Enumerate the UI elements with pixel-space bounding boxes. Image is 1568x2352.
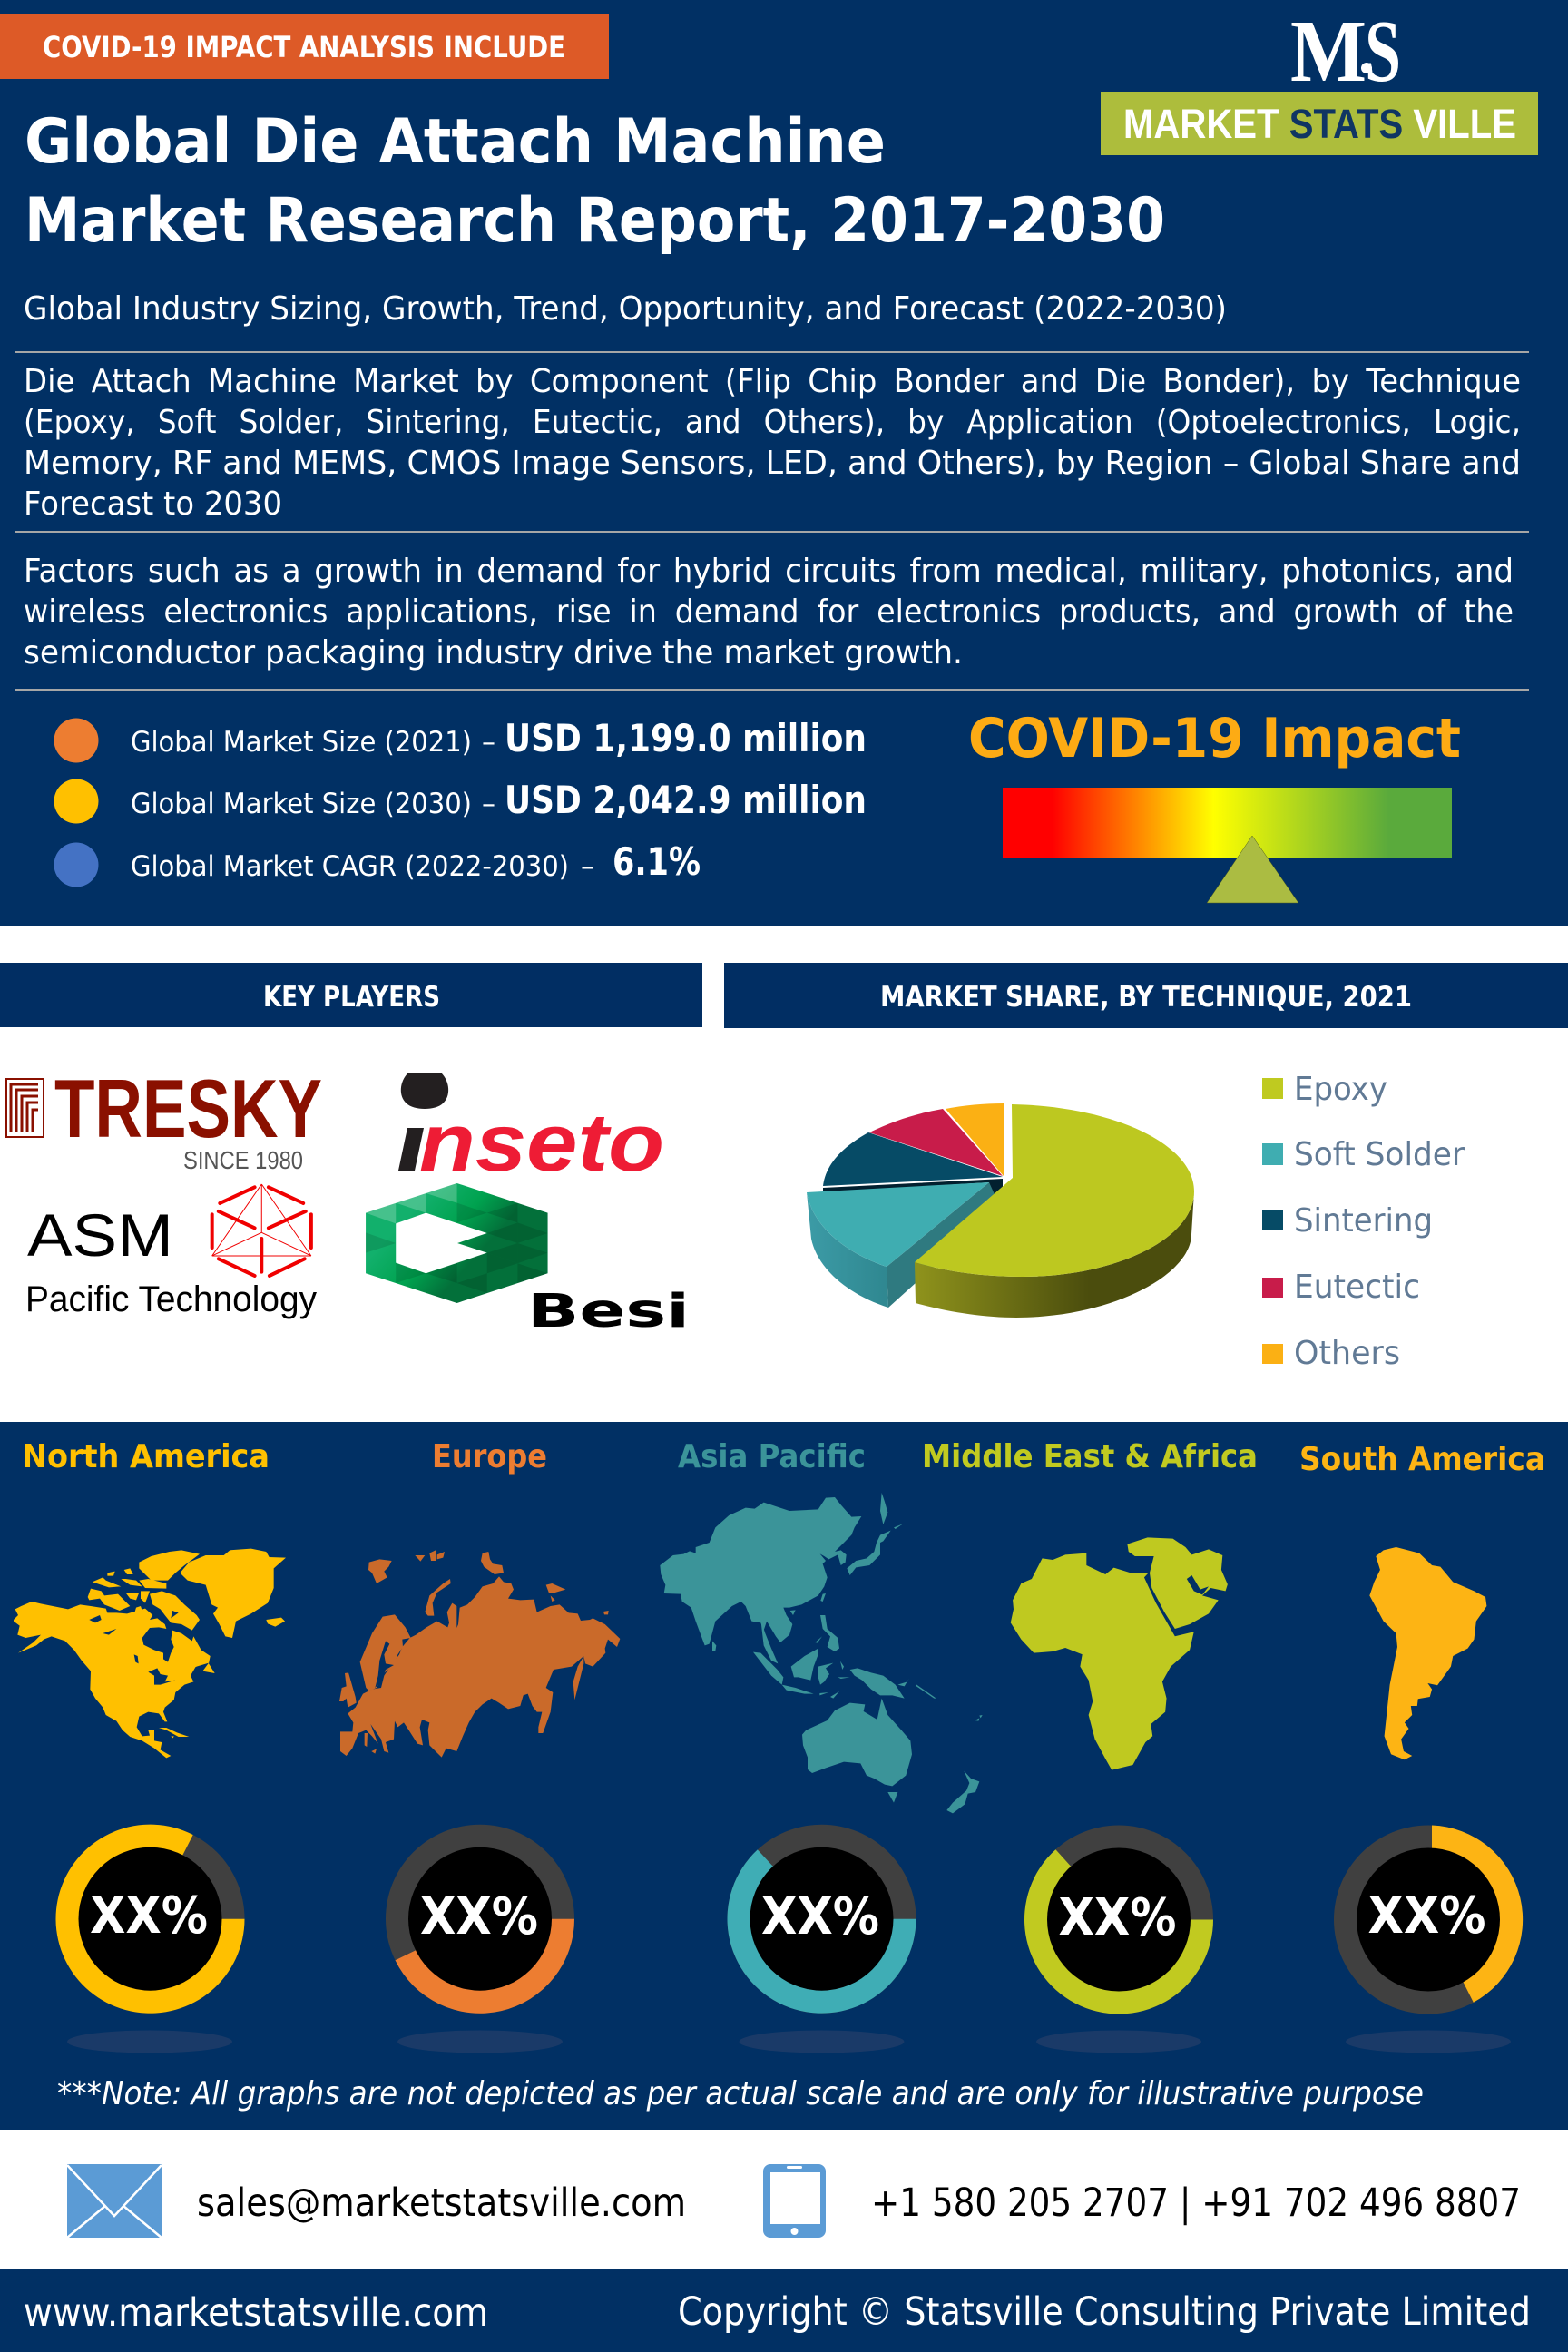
map: north america [14, 1549, 286, 1758]
email: sales@marketstatsville.com [197, 2180, 686, 2226]
logo: ASM Pacific Technology [25, 1184, 317, 1319]
legend item: soft solder: Soft Solder [1294, 1136, 1465, 1173]
logo: Tresky: SINCE 1980 [183, 1146, 303, 1174]
label: asia pacific: Asia Pacific [678, 1438, 866, 1475]
legend item: sintering: Sintering [1294, 1202, 1433, 1240]
stat: market size 2030: Global Market Size (2030) [131, 788, 472, 820]
website: www.marketstatsville.com [24, 2290, 488, 2336]
logo: Besi [366, 1183, 690, 1338]
factors paragraph [24, 553, 1514, 671]
note: ***Note: All graphs are not depicted as per actual scale and are only for illustrative purpose [57, 2075, 1424, 2112]
donut: north america: XX% [90, 1886, 208, 1945]
map: asia pacific [660, 1493, 983, 1813]
label: north america: North America [22, 1438, 270, 1475]
donut: asia pacific: XX% [761, 1887, 879, 1946]
legend item: eutectic: Eutectic [1294, 1269, 1420, 1306]
stat: CAGR [54, 839, 701, 887]
stat: CAGR: – [581, 850, 594, 883]
logo: Tresky [6, 1063, 322, 1174]
donut: south america [1334, 1826, 1523, 2053]
stat: CAGR: Global Market CAGR (2022-2030) [131, 850, 569, 883]
icon: phone [763, 2164, 826, 2238]
covid badge: COVID-19 IMPACT ANALYSIS INCLUDE [43, 30, 565, 64]
segmentation paragraph [24, 363, 1521, 523]
panel: header [0, 0, 1568, 926]
segmentation paragraph: Forecast to 2030 [24, 485, 282, 523]
donut: south america: XX% [1368, 1886, 1486, 1945]
icon: ASM crystal [212, 1184, 311, 1276]
logo: Market Stats Ville [1101, 3, 1538, 155]
icon: envelope [67, 2164, 162, 2238]
heading: market share: MARKET SHARE, BY TECHNIQUE, 2021 [880, 981, 1412, 1014]
logo: inseto: nseto [419, 1098, 664, 1189]
donut: north america [56, 1825, 245, 2053]
title: Global Die Attach Machine [24, 106, 886, 178]
panel: contact [0, 2130, 1568, 2269]
donut: europe [386, 1825, 574, 2053]
panel: footer [0, 2269, 1568, 2352]
segmentation paragraph: Die Attach Machine Market by Component (Flip Chip Bonder and Die Bonder), by Technique [24, 363, 1521, 400]
stat: market size 2021 [54, 716, 867, 762]
heading: key players: KEY PLAYERS [263, 981, 440, 1014]
label: south america: South America [1299, 1441, 1545, 1478]
logo: Market Stats Ville: M [1290, 3, 1367, 101]
slice: soft solder [807, 1182, 998, 1308]
logo: ASM Pacific Technology: ASM [27, 1201, 173, 1269]
map: europe and russia [339, 1550, 620, 1758]
logo: Tresky: TRESKY [54, 1063, 322, 1155]
legend: techniques [1262, 1071, 1465, 1372]
heading: key players [0, 963, 702, 1027]
subtitle: Global Industry Sizing, Growth, Trend, Opportunity, and Forecast (2022-2030) [24, 290, 1227, 328]
logo: inseto [398, 1073, 664, 1189]
slice: eutectic [869, 1109, 1003, 1176]
chart: market share 3D pie [807, 1103, 1194, 1318]
stat: market size 2021: – [482, 726, 495, 759]
stat: market size 2030: USD 2,042.9 million [505, 778, 867, 822]
panel: regions [0, 1422, 1568, 2130]
segmentation paragraph: Memory, RF and MEMS, CMOS Image Sensors, LED, and Others), by Region – Global Share and [24, 445, 1521, 482]
donut: middle east and africa [1024, 1826, 1213, 2053]
stat: market size 2021: USD 1,199.0 million [505, 716, 867, 760]
label: europe: Europe [432, 1438, 547, 1475]
donut: asia pacific [727, 1825, 916, 2053]
heading: market share [724, 963, 1568, 1028]
map: south america [1369, 1547, 1486, 1759]
logo: Market Stats Ville: S [1365, 3, 1401, 101]
logo: Market Stats Ville: MARKET STATS VILLE [1123, 101, 1516, 147]
slice: epoxy [915, 1104, 1194, 1318]
stat: market size 2030: – [482, 788, 495, 820]
donut: europe: XX% [420, 1887, 538, 1946]
logo: Besi: Besi [527, 1285, 690, 1338]
stat: market size 2021: Global Market Size (2021) [131, 726, 472, 759]
factors paragraph: semiconductor packaging industry drive the market growth. [24, 634, 963, 671]
slice: others [946, 1103, 1004, 1176]
factors paragraph: Factors such as a growth in demand for hybrid circuits from medical, military, photonics, and [24, 553, 1514, 590]
stat: CAGR: 6.1% [612, 839, 701, 884]
legend item: others: Others [1294, 1335, 1400, 1372]
covid-19 impact gauge: COVID-19 Impact [968, 707, 1461, 770]
covid-19 impact gauge [968, 707, 1461, 903]
logo: ASM Pacific Technology: Pacific Technology [25, 1279, 317, 1319]
title [24, 106, 1165, 257]
slice: sintering [823, 1132, 1003, 1200]
label: middle east and africa: Middle East & Africa [922, 1438, 1258, 1475]
covid badge [0, 14, 609, 79]
panel: key player logos [6, 1063, 690, 1338]
legend item: epoxy: Epoxy [1294, 1071, 1387, 1108]
stat: market size 2030 [54, 778, 867, 824]
donut: middle east and africa: XX% [1058, 1888, 1176, 1947]
title: Market Research Report, 2017-2030 [24, 185, 1165, 257]
map: middle east and africa [1011, 1537, 1228, 1770]
